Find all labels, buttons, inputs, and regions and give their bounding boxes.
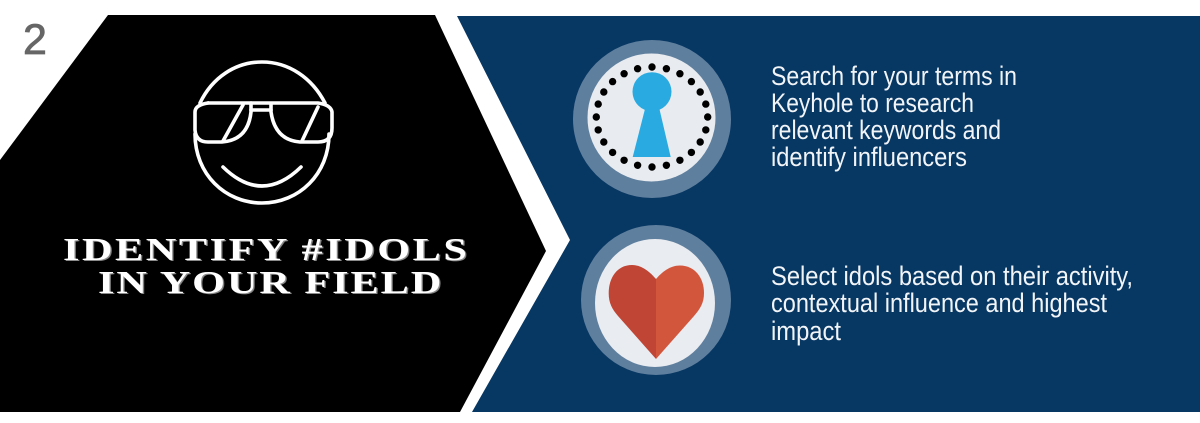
icon: keyhole badge [573,40,731,198]
text: select step: contextual influence and highest [771,288,1107,318]
title [63,233,467,301]
heart left half [609,265,656,359]
title: IDENTIFY #IDOLS [63,233,467,268]
title: IN YOUR FIELD [98,266,441,301]
panel: black arrow [0,15,546,412]
keyhole [632,72,672,157]
text: search step: identify influencers [771,142,967,172]
panel: blue arrow [457,16,1200,412]
text: search step: Keyhole to research [771,88,974,118]
text: search step: Search for your terms in [771,61,1017,91]
text: search step [771,61,1017,172]
heart right half [656,266,704,359]
text: select step: Select idols based on their activity, [771,261,1133,291]
text: search step: relevant keywords and [771,115,1001,145]
dot ring [593,63,711,171]
step number: 2 [23,16,47,64]
text: select step [771,261,1133,346]
text: select step: impact [771,316,841,346]
icon: heart badge [581,225,731,375]
icon: smiley with sunglasses [195,62,332,203]
